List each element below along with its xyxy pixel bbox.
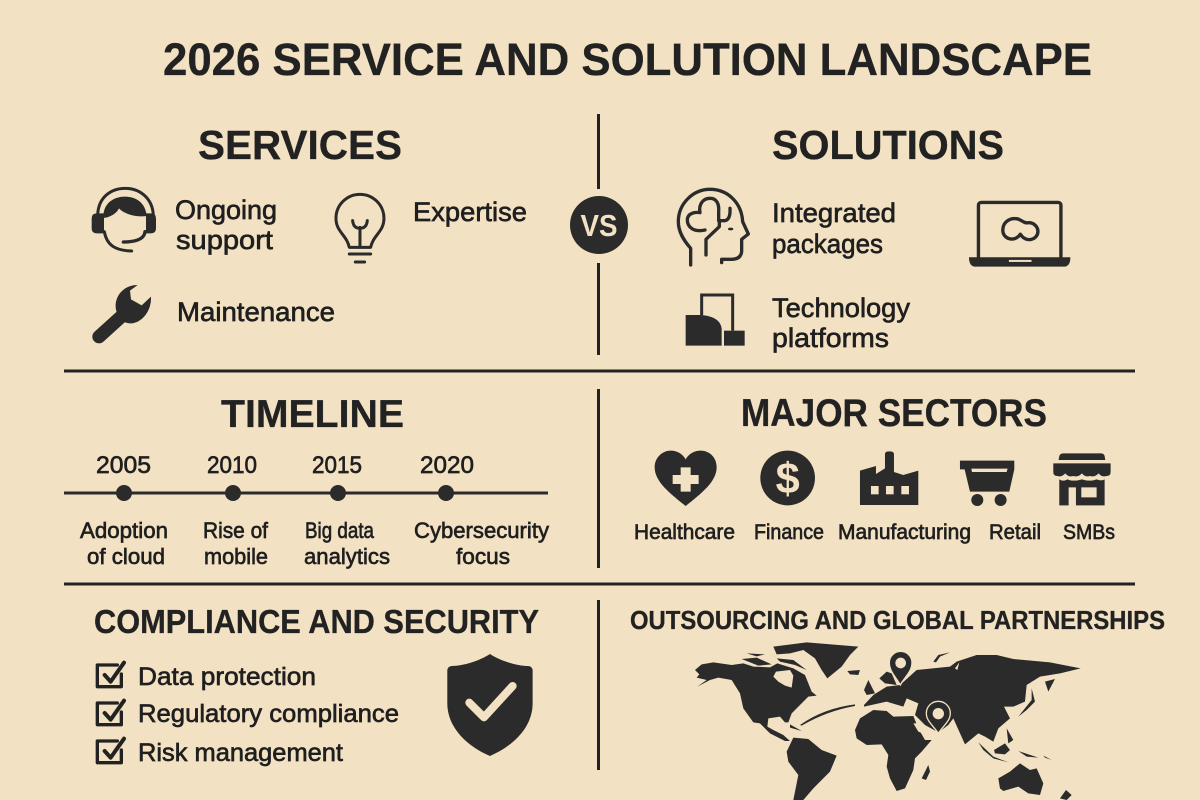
text: technology platforms: Technology: [772, 293, 910, 323]
title: 2026 SERVICE AND SOLUTION LANDSCAPE: [163, 34, 1092, 85]
text: ongoing support: support: [176, 225, 274, 255]
icon: head with brain: [678, 189, 748, 265]
world map: [695, 642, 1081, 800]
vs badge: VS: [580, 208, 618, 243]
heading: solutions: SOLUTIONS: [772, 122, 1004, 168]
checklist item: regulatory compliance: Regulatory compliance: [138, 700, 399, 728]
americas and greenland: [695, 642, 860, 800]
text: integrated packages: packages: [772, 229, 883, 259]
timeline entry 2010: [203, 452, 269, 569]
timeline entry 2005: Adoption: [80, 518, 168, 543]
panel: timeline: [64, 393, 549, 569]
timeline entry 2010: 2010: [207, 452, 257, 479]
panel: compliance and security: [94, 603, 539, 767]
label: retail: Retail: [989, 521, 1041, 544]
vs badge: [570, 196, 628, 254]
eurasia, africa and oceania: [855, 652, 1081, 800]
heading: compliance and security: COMPLIANCE AND SECURITY: [94, 603, 539, 640]
timeline entry 2015: Big data: [305, 518, 375, 543]
timeline entry 2020: focus: [456, 544, 510, 569]
icon: healthcare heart: [655, 451, 717, 506]
timeline entry 2010: Rise of: [203, 518, 269, 543]
panel: major sectors: [634, 392, 1115, 544]
text: expertise: Expertise: [413, 197, 527, 227]
icon: shield with check: [447, 654, 533, 756]
text: maintenance: Maintenance: [177, 297, 335, 327]
heading: major sectors: MAJOR SECTORS: [741, 392, 1047, 435]
text: technology platforms: [772, 293, 910, 353]
icon: wrench: [99, 285, 151, 337]
icon: light bulb: [336, 194, 384, 262]
label: finance: Finance: [754, 521, 824, 544]
label: smbs: SMBs: [1063, 521, 1115, 544]
icon: factory: [860, 451, 918, 505]
label: manufacturing: Manufacturing: [838, 521, 971, 544]
timeline entry 2015: analytics: [304, 544, 390, 569]
text: ongoing support: Ongoing: [175, 195, 277, 225]
map pin: south asia: [926, 701, 950, 733]
text: technology platforms: platforms: [772, 323, 889, 353]
heading: timeline: TIMELINE: [221, 393, 404, 436]
text: integrated packages: Integrated: [772, 198, 896, 228]
panel: solutions: [678, 122, 1070, 353]
timeline entry 2020: 2020: [420, 452, 474, 479]
map pin: europe: [889, 651, 912, 685]
panel: services: [92, 122, 527, 337]
text: integrated packages: [772, 198, 896, 259]
checklist item: risk management: Risk management: [138, 739, 343, 767]
timeline entry 2005: of cloud: [87, 544, 165, 569]
heading: services: SERVICES: [198, 122, 402, 168]
timeline entry 2005: [80, 452, 168, 569]
label: healthcare: Healthcare: [634, 521, 735, 544]
timeline entry 2015: [304, 452, 390, 569]
text: ongoing support: [175, 195, 277, 255]
icon: headset: [92, 188, 156, 251]
timeline entry 2010: mobile: [204, 544, 268, 569]
timeline entry 2020: Cybersecurity: [414, 518, 549, 543]
panel: outsourcing and global partnerships: [630, 605, 1165, 800]
icon: finance coin: [760, 451, 815, 505]
icon: shopping cart: [960, 461, 1014, 506]
timeline entry 2020: [414, 452, 549, 569]
timeline axis with markers: [64, 485, 548, 501]
icon: finance coin: $: [776, 455, 800, 503]
timeline entry 2015: 2015: [312, 452, 362, 479]
timeline entry 2005: 2005: [96, 452, 151, 479]
heading: outsourcing and global partnerships: OUTSOURCING AND GLOBAL PARTNERSHIPS: [630, 605, 1165, 635]
icon: storefront: [1053, 453, 1111, 505]
icon: platform blocks: [686, 295, 745, 346]
checklist item: data protection: Data protection: [138, 663, 316, 691]
icon: laptop: [969, 202, 1070, 267]
